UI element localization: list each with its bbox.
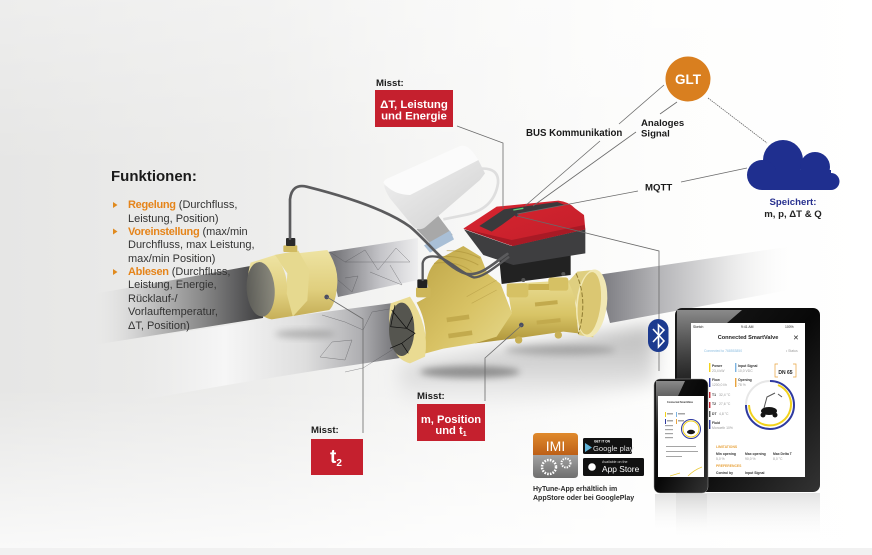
line: box 1 to controller bbox=[457, 126, 503, 208]
icon: IMI app: IMI bbox=[546, 438, 565, 454]
pipe: upper left bbox=[93, 263, 267, 345]
pipe: upper middle bbox=[328, 238, 418, 297]
list text: Ablesen (Durchfluss, bbox=[128, 266, 230, 278]
box: lower mount bbox=[499, 255, 571, 284]
badge: Google Play bbox=[583, 438, 634, 454]
tablet readings: Input Signal bbox=[738, 364, 757, 368]
box: LEDs bbox=[513, 208, 523, 210]
shadow: upper fitting bbox=[275, 330, 335, 338]
shadows under valve bbox=[275, 330, 615, 378]
tablet limitations: Input Signal bbox=[745, 471, 764, 475]
tablet mockup: • Status bbox=[786, 349, 798, 353]
actuator bbox=[383, 146, 498, 253]
body: Y section bbox=[417, 246, 512, 354]
callout: m, Position und t1: 1 bbox=[463, 431, 467, 438]
cable: pipe sensor bbox=[290, 186, 507, 274]
tablet readings: 32,4 °C bbox=[719, 393, 731, 397]
fitting collar bbox=[248, 255, 293, 319]
line: analog upper bbox=[660, 102, 677, 114]
list text: Leistung, Energie, bbox=[128, 279, 217, 291]
badge: App Store: Available on the bbox=[602, 460, 628, 464]
pipe: line pattern bbox=[320, 248, 410, 372]
app badges: AppStore oder bei GooglePlay bbox=[533, 495, 634, 502]
connector lines bbox=[327, 85, 767, 433]
tablet readings: Flow bbox=[712, 378, 720, 382]
tablet limitations bbox=[716, 445, 793, 475]
phone chart bbox=[670, 467, 702, 476]
list text: max/min Position) bbox=[128, 253, 215, 265]
tablet connection row: Connected to 768553850 bbox=[704, 349, 742, 353]
cable: valve sensor bbox=[423, 256, 508, 280]
badge: Google Play: Google play bbox=[593, 444, 634, 453]
tablet mockup: ✕ bbox=[793, 335, 799, 342]
fitting opening bbox=[245, 261, 277, 318]
callout: m, Position und t1 bbox=[417, 391, 485, 441]
list text: Durchfluss, max Leistung, bbox=[128, 239, 255, 251]
callout: m, Position und t1: und t bbox=[435, 425, 463, 437]
tablet limitations: 90,0 % bbox=[745, 457, 756, 461]
tablet limitations: LIMITATIONS bbox=[716, 445, 738, 449]
badge: App Store bbox=[583, 458, 644, 476]
list text: Voreinstellung (max/min bbox=[128, 226, 248, 238]
heading: Funktionen: Funktionen: bbox=[111, 168, 197, 185]
line: BUS upper bbox=[619, 85, 664, 124]
fitting right cylinder bbox=[293, 250, 337, 316]
shadow: valve bbox=[420, 366, 520, 378]
pipe sections bbox=[93, 238, 800, 402]
line: m, Position bbox=[485, 325, 522, 401]
body: opening bbox=[389, 303, 414, 356]
tablet readings: 10,0 VDC bbox=[738, 369, 753, 373]
sensor seat on valve bbox=[416, 287, 431, 297]
list text: Regelung (Durchfluss, bbox=[128, 199, 237, 211]
pipe: lower left bbox=[130, 303, 400, 402]
valve assembly traced bbox=[245, 146, 610, 363]
phone gauge bbox=[682, 420, 700, 438]
caption: HyTune-App erhältlich im bbox=[533, 486, 617, 493]
measure dot bbox=[324, 295, 329, 299]
tablet readings: Monoeth 10% bbox=[712, 426, 733, 430]
box: dark body bbox=[464, 229, 585, 265]
pipe: right bbox=[597, 245, 800, 323]
line: bluetooth bbox=[517, 216, 659, 319]
phone readings bbox=[665, 412, 698, 457]
actuator: ring bbox=[424, 231, 454, 253]
tablet readings: T1 bbox=[712, 393, 716, 397]
line: analog lower bbox=[533, 132, 636, 206]
tablet gauge bbox=[746, 381, 794, 429]
tablet readings: Power bbox=[712, 364, 723, 368]
cables bbox=[290, 186, 508, 280]
body: casting marks bbox=[446, 300, 561, 338]
fitting hex bbox=[273, 251, 309, 318]
valve body bbox=[389, 246, 610, 363]
icon: bluetooth bbox=[648, 319, 668, 352]
line: BUS lower bbox=[525, 141, 600, 206]
fitting: temperature sensor on pipe bbox=[245, 238, 337, 319]
cloud: Speichert bbox=[747, 140, 840, 220]
label: Analoges Signal: Analoges bbox=[641, 118, 684, 129]
sensor plug on valve bbox=[417, 279, 427, 288]
badge: App Store: App Store bbox=[602, 464, 640, 474]
phone title: Connected SmartValve bbox=[667, 401, 694, 404]
GLT circle: GLT bbox=[675, 72, 702, 87]
tablet reflection bbox=[676, 493, 820, 543]
tablet readings: 27,6 °C bbox=[719, 402, 731, 406]
list text: Vorlauftemperatur, bbox=[128, 306, 218, 318]
tablet DN badge bbox=[775, 364, 796, 377]
phone screen bbox=[658, 396, 704, 477]
cloud: Speichert: m, p, ΔT & Q bbox=[764, 209, 822, 220]
callout: Leistung und Energie: ΔT, Leistung bbox=[380, 99, 448, 111]
body: right flange bbox=[568, 270, 593, 337]
label: MQTT: MQTT bbox=[645, 182, 672, 194]
body: net in opening bbox=[390, 305, 415, 353]
body: left flange bbox=[389, 297, 426, 363]
sensor seat bbox=[283, 245, 297, 252]
line: MQTT left bbox=[517, 191, 638, 214]
list text: Rücklauf-/ bbox=[128, 293, 178, 305]
callout: Leistung und Energie: Misst: bbox=[376, 78, 404, 89]
tablet readings: DT bbox=[712, 412, 717, 416]
tablet readings bbox=[709, 363, 757, 430]
tablet body bbox=[675, 308, 820, 492]
cloud caption: Speichert: bbox=[770, 197, 816, 208]
tablet limitations: 8,0 °C bbox=[773, 457, 783, 461]
actuator: top face bbox=[383, 146, 478, 195]
body: right pipe bbox=[475, 280, 578, 343]
actuator: front face bbox=[384, 160, 485, 229]
GLT circle bbox=[666, 56, 710, 102]
callout: t2 bbox=[311, 425, 363, 475]
tablet limitations: Control by bbox=[716, 471, 733, 475]
tablet readings: Opening bbox=[738, 378, 752, 382]
phone reflection bbox=[655, 494, 707, 534]
heading and functions list bbox=[111, 168, 255, 332]
line: t2 bbox=[327, 297, 363, 433]
box: red cover bbox=[463, 201, 585, 246]
callout: Leistung und Energie: und Energie bbox=[381, 110, 447, 122]
tablet readings: Fluid bbox=[712, 421, 720, 425]
tablet limitations: 5,0 % bbox=[716, 457, 725, 461]
callout: m, Position und t1: m, Position bbox=[421, 414, 481, 426]
tablet DN badge: DN 65 bbox=[778, 370, 793, 376]
electronics box bbox=[463, 201, 585, 284]
app badges bbox=[533, 433, 644, 502]
tablet limitations: Min opening bbox=[716, 452, 736, 456]
body: bosses bbox=[507, 283, 528, 297]
tablet limitations: Max Delta T bbox=[773, 452, 793, 456]
tablet limitations: Max opening bbox=[745, 452, 766, 456]
tablet gloss bbox=[677, 310, 742, 400]
tablet screen bbox=[691, 323, 805, 477]
callout: t2: 2 bbox=[336, 458, 342, 469]
list text: ΔT, Position) bbox=[128, 320, 190, 332]
line: MQTT right bbox=[681, 168, 747, 182]
tablet mockup bbox=[675, 308, 820, 543]
list text: Leistung, Position) bbox=[128, 213, 218, 225]
callout: t2: Misst: bbox=[311, 425, 339, 436]
callout: t2: t bbox=[330, 447, 336, 468]
box: measure dot bbox=[515, 213, 518, 217]
actuator: neck bbox=[417, 216, 453, 247]
actuator: cable loop bbox=[443, 169, 498, 219]
list bullets bbox=[113, 202, 118, 275]
tablet readings: 4,8 °C bbox=[719, 412, 729, 416]
tablet readings: 78 % bbox=[738, 383, 746, 387]
sensor plug bbox=[286, 238, 295, 246]
tablet limitations: PREFERENCES bbox=[716, 464, 742, 468]
phone body bbox=[654, 379, 708, 493]
phone mockup bbox=[654, 379, 708, 534]
tablet mockup: 100% bbox=[785, 325, 794, 329]
box: dark display stripe bbox=[479, 202, 565, 232]
label: Analoges Signal: Signal bbox=[641, 128, 670, 140]
callout: m, Position und t1: Misst: bbox=[417, 391, 445, 402]
tablet status bar: Sketch bbox=[693, 325, 703, 329]
tablet title: Connected SmartValve bbox=[718, 335, 778, 341]
tablet readings: T2 bbox=[712, 402, 716, 406]
body: bonnet ribs bbox=[434, 251, 480, 272]
cloud icon bbox=[747, 140, 840, 190]
phone gloss bbox=[656, 381, 685, 440]
tablet readings: 1200,0 l/h bbox=[712, 383, 727, 387]
line: GLT to cloud bbox=[708, 98, 767, 143]
body: feet bbox=[515, 336, 522, 344]
tablet readings: 23,4 kW bbox=[712, 369, 725, 373]
label: BUS Kommunikation: BUS Kommunikation bbox=[526, 128, 622, 139]
callout: Leistung und Energie bbox=[375, 78, 453, 127]
badge: Google Play: GET IT ON bbox=[594, 440, 611, 444]
tablet mockup: 9:41 AM bbox=[741, 325, 754, 329]
measure dot bbox=[519, 323, 524, 327]
shadow: valve right bbox=[505, 345, 615, 355]
list text bbox=[128, 199, 255, 332]
